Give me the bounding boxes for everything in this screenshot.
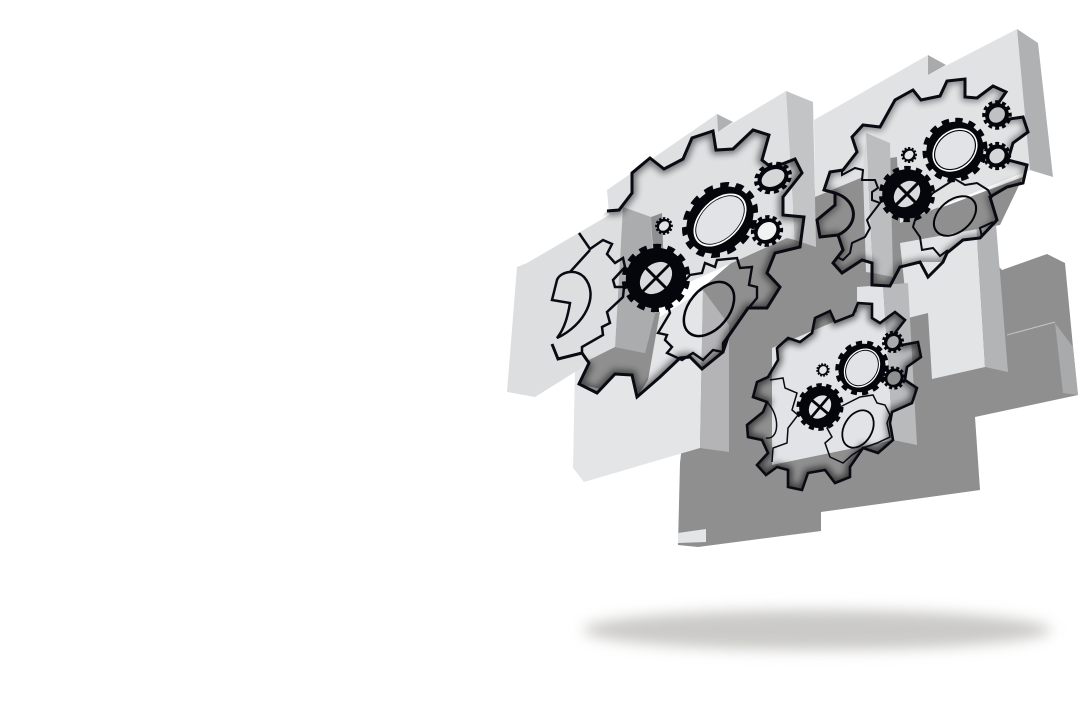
illustration: floating 3D blocks with gears [507,29,1078,657]
small light tab [678,529,706,543]
first gear outline [552,130,804,397]
right middle block [900,222,1008,379]
back gray block [678,160,1078,547]
first gear cutout [552,130,804,397]
third gear middle black gear [789,376,851,438]
back right box side [1007,322,1078,395]
third gear cutout [744,303,921,490]
second gear middle black gear [870,157,944,231]
third gear thin gears [766,378,890,463]
second gear big black gear [913,108,997,192]
third gear small gears [815,328,908,392]
upper panel behind first gear [607,91,816,300]
second gear thin gears [837,168,993,260]
second gear outline [817,79,1028,286]
first gear crescent and left gear [552,233,625,353]
second gear cutout [817,79,1028,286]
third gear big black gear [827,333,897,403]
second gear small gears [899,97,1015,173]
lower left block [573,290,729,482]
left block with protruding column [507,207,655,397]
upper right panel behind second gear [814,29,1053,277]
lower central block behind third gear [772,283,917,465]
ground shadow [583,610,1051,650]
first gear big black gear [670,170,770,270]
first gear middle black gear [611,233,701,323]
first gear right thin gear [658,258,757,360]
third gear outline [747,303,921,490]
first gear small gears [653,158,794,251]
